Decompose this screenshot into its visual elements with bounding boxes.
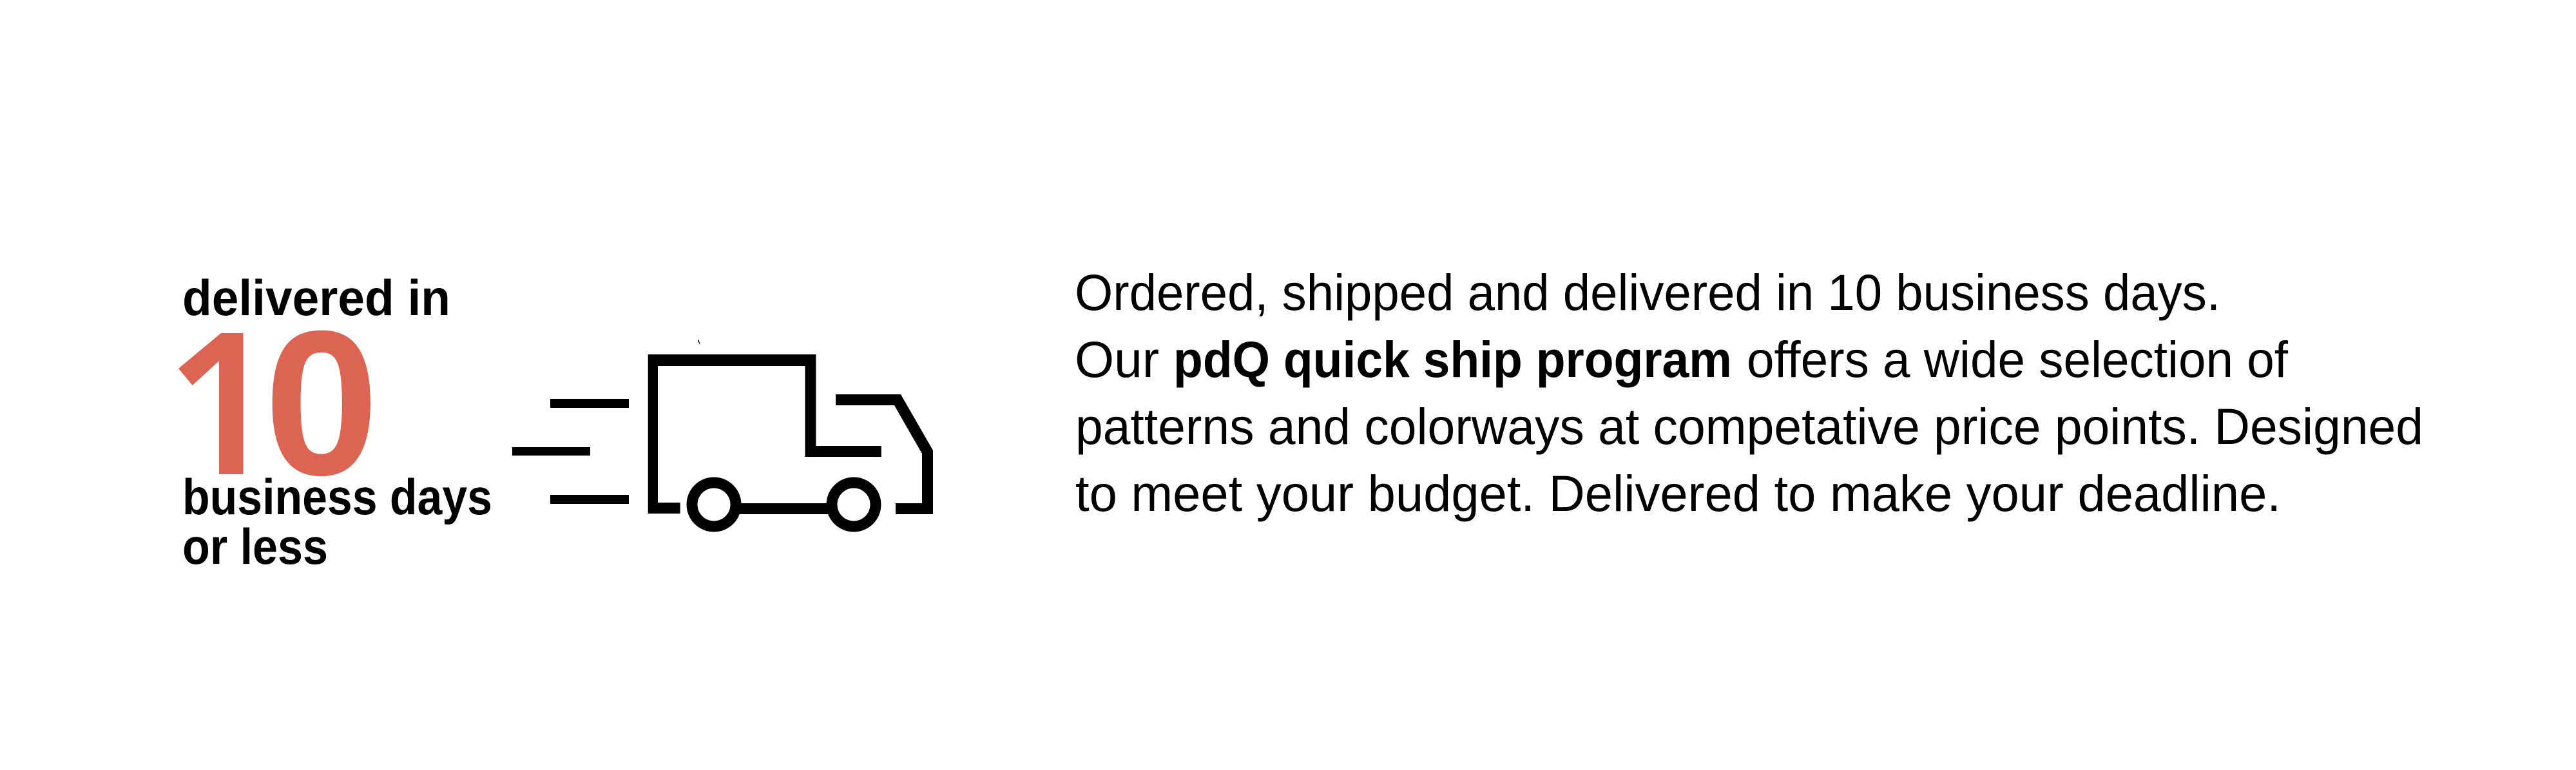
big number: 10: [178, 330, 370, 477]
truck axle: [735, 503, 834, 514]
line 2: pdQ quick ship program: [1173, 331, 1732, 388]
icon: delivery truck with speed lines: [512, 340, 933, 526]
line 4: to meet your budget. Delivered to make your deadline.: [1075, 465, 2281, 522]
panel: delivery claim: [178, 278, 491, 564]
heading: delivered in: delivered in: [182, 269, 450, 326]
line 2: [1075, 331, 2289, 388]
big number: 10: 10: [149, 287, 379, 518]
text: business days: business days: [182, 468, 492, 525]
speed lines: [512, 399, 629, 504]
text block: program description: [1075, 264, 2423, 522]
truck wheel left: [692, 483, 736, 526]
line 3: patterns and colorways at competative price points. Designed: [1075, 398, 2423, 455]
truck cargo body: [648, 354, 881, 514]
line 1: Ordered, shipped and delivered in 10 business days.: [1075, 264, 2220, 321]
small stray mark: [698, 340, 700, 345]
truck wheel right: [832, 483, 876, 526]
line 2: Our: [1075, 331, 1159, 388]
line 2: offers a wide selection of: [1747, 331, 2289, 388]
truck cab: [836, 394, 933, 514]
text: or less: or less: [182, 518, 328, 575]
